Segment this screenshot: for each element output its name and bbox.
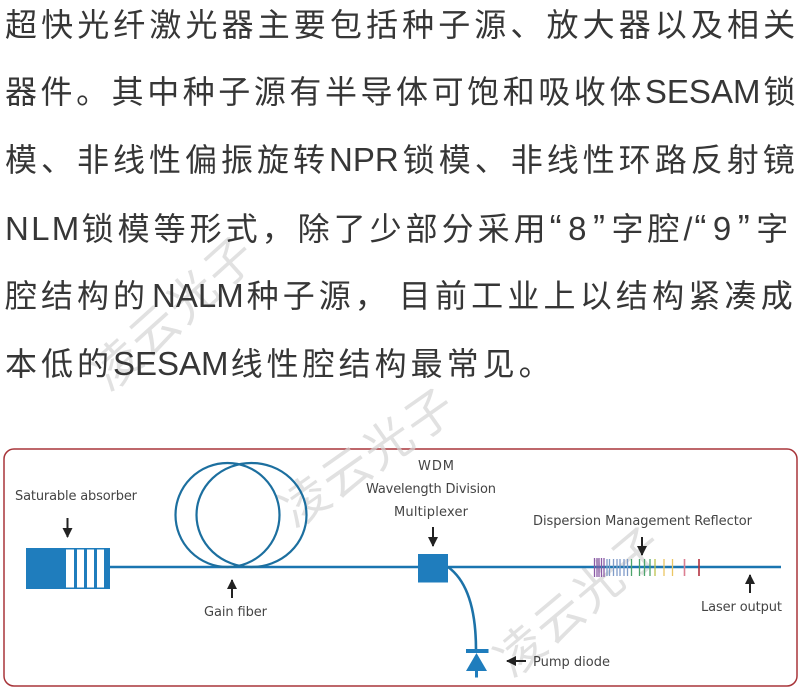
text block: paragraph on ultrafast fiber lasers <box>5 7 799 382</box>
label: pump diode: Pump diode <box>533 655 610 670</box>
watermark 1: 凌云光子 <box>73 218 268 403</box>
label: gain fiber: Gain fiber <box>204 605 268 620</box>
main fiber line <box>108 566 781 568</box>
pump fiber curve <box>448 567 476 650</box>
label: multiplexer: Multiplexer <box>394 505 469 520</box>
icon: WDM box <box>418 554 448 582</box>
label: saturable absorber: Saturable absorber <box>15 489 138 504</box>
text line 6: 本低的SESAM线性腔结构最常见。 <box>5 345 555 382</box>
label: wavelength division: Wavelength Division <box>366 482 496 497</box>
text line 5: 腔结构的NALM种子源，目前工业上以结构紧凑成 <box>5 277 797 314</box>
icon: pump diode <box>466 649 488 678</box>
text line 2: 器件。其中种子源有半导体可饱和吸收体SESAM锁 <box>5 73 799 110</box>
labels <box>15 459 782 670</box>
label: WDM: WDM <box>418 459 454 474</box>
icon: gain fiber coil <box>176 463 306 567</box>
watermark 2: 凌云光子 <box>263 368 467 540</box>
dispersion management reflector grating <box>594 558 699 577</box>
label: laser output: Laser output <box>701 600 782 615</box>
text line 3: 模、非线性偏振旋转NPR锁模、非线性环路反射镜 <box>5 141 799 178</box>
text line 1: 超快光纤激光器主要包括种子源、放大器以及相关 <box>5 7 799 43</box>
arrows <box>68 518 750 661</box>
label: dispersion management reflector: Dispersion Management Reflector <box>533 514 753 529</box>
panel: diagram frame <box>4 449 797 686</box>
icon: saturable absorber block <box>26 548 110 589</box>
watermark 3: 凌云光子 <box>477 508 675 690</box>
text line 4: NLM锁模等形式，除了少部分采用“8”字腔/“9”字 <box>5 207 792 248</box>
